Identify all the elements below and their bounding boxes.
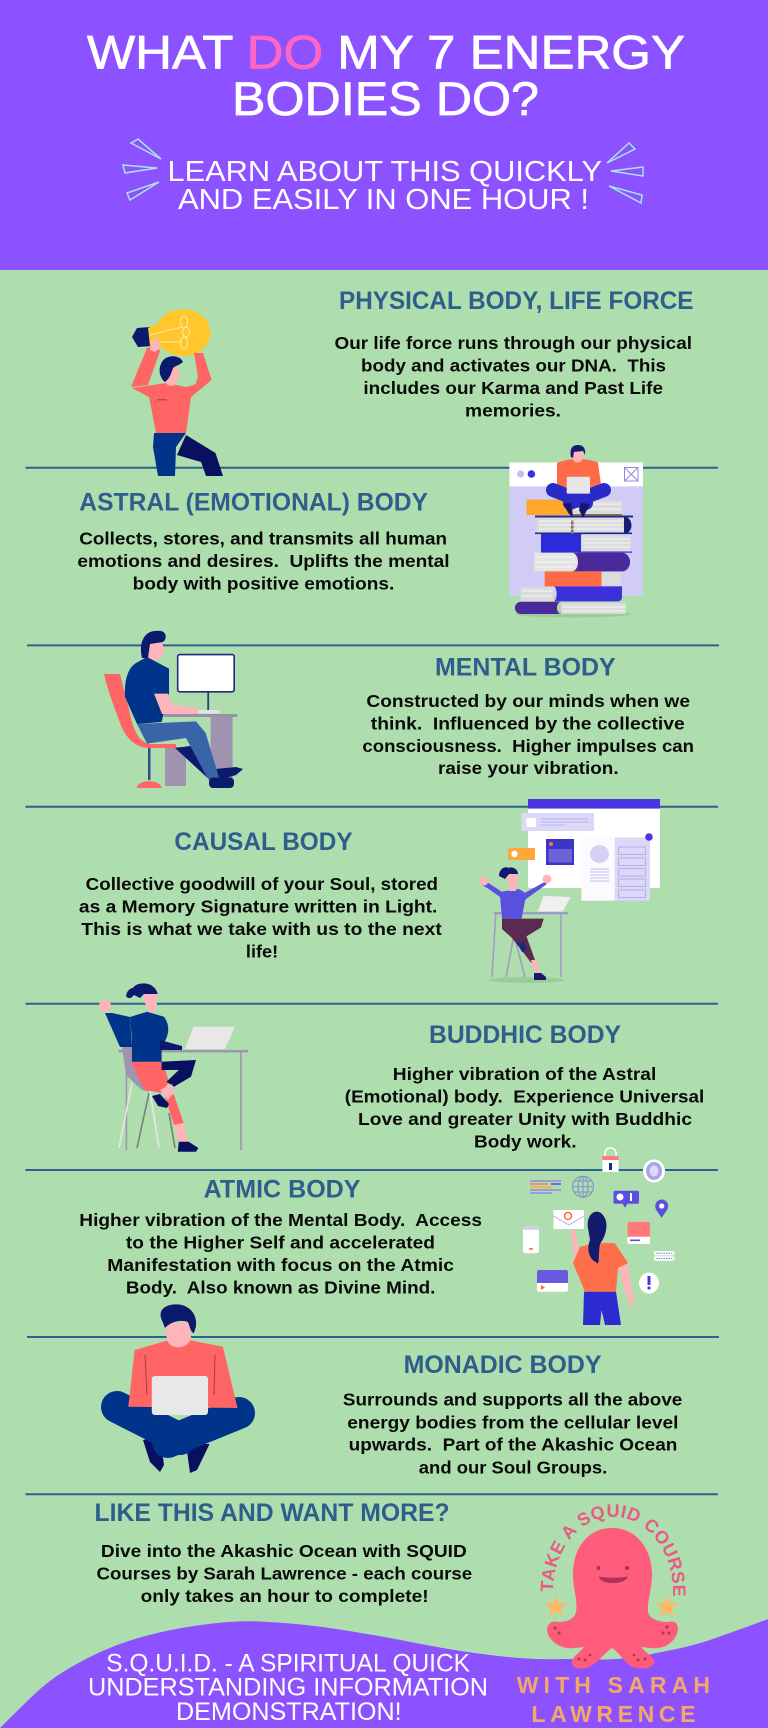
panel: call to action xyxy=(94,1499,472,1606)
icon: SQUID course badge xyxy=(516,1504,710,1727)
icon: person on book stack xyxy=(509,445,643,618)
text: buddhic body description: (Emotional) body. Experience Universal xyxy=(345,1086,704,1106)
title: WHAT DO MY 7 ENERGY xyxy=(87,26,685,78)
text: causal body description: This is what we take with us to the next xyxy=(81,919,442,939)
text: causal body description xyxy=(79,874,442,962)
text: mental body description: think. Influenced by the collective xyxy=(371,713,685,733)
heading: like this and want more: LIKE THIS AND WANT MORE? xyxy=(94,1499,450,1527)
text: mental body description: consciousness. Higher impulses can xyxy=(362,736,694,756)
text: physical body description xyxy=(334,333,692,421)
subtitle: AND EASILY IN ONE HOUR ! xyxy=(178,184,589,216)
panel: physical body xyxy=(131,287,694,476)
subtitle xyxy=(168,156,602,216)
text: course description: Dive into the Akashic Ocean with SQUID xyxy=(101,1541,467,1561)
text: physical body description: body and activates our DNA. This xyxy=(361,356,666,376)
text: physical body description: includes our Karma and Past Life xyxy=(363,378,663,398)
heading: atmic body: ATMIC BODY xyxy=(204,1176,361,1204)
title xyxy=(87,26,685,125)
text: SQUID footer tagline: UNDERSTANDING INFORMATION xyxy=(88,1674,488,1702)
text: atmic body description: to the Higher Self and accelerated xyxy=(126,1232,435,1252)
text: atmic body description: Higher vibration of the Mental Body. Access xyxy=(79,1210,482,1230)
text: SQUID footer tagline: S.Q.U.I.D. - A SPIRITUAL QUICK xyxy=(106,1650,470,1678)
subtitle: LEARN ABOUT THIS QUICKLY xyxy=(168,156,602,188)
curved text: take a squid course: TAKE A SQUID COURSE xyxy=(540,1504,686,1596)
icon: person cross-legged with laptop xyxy=(117,1304,239,1473)
text: monadic body description: energy bodies from the cellular level xyxy=(347,1412,678,1432)
text: atmic body description: Manifestation with focus on the Atmic xyxy=(107,1255,454,1275)
icon: man at computer desk xyxy=(104,631,243,788)
panel: atmic body xyxy=(79,1148,675,1325)
text: astral body description: body with positive emotions. xyxy=(133,573,394,593)
text: atmic body description xyxy=(79,1210,482,1297)
text: with sarah lawrence xyxy=(517,1672,710,1727)
panel: astral body xyxy=(77,445,643,618)
section divider lines xyxy=(26,468,719,1494)
text: buddhic body description: Love and greater Unity with Buddhic xyxy=(358,1109,692,1129)
text: SQUID footer tagline: DEMONSTRATION! xyxy=(176,1698,402,1726)
text: mental body description: Constructed by our minds when we xyxy=(366,691,690,711)
text: astral body description: emotions and desires. Uplifts the mental xyxy=(77,551,450,571)
text: physical body description: memories. xyxy=(465,401,561,421)
text: causal body description: Collective goodwill of your Soul, stored xyxy=(86,874,438,894)
text: physical body description: Our life force runs through our physical xyxy=(334,333,692,353)
text: course description xyxy=(96,1541,472,1606)
icon: woman with floating app icons xyxy=(523,1148,674,1325)
icon: woman at desk with web window xyxy=(480,799,660,983)
wave: purple footer shape xyxy=(0,1619,768,1728)
panel: monadic body xyxy=(117,1304,683,1477)
text: mental body description xyxy=(362,691,694,778)
text: causal body description: as a Memory Signature written in Light. xyxy=(79,896,437,916)
title: BODIES DO? xyxy=(232,72,539,125)
text: with sarah lawrence: LAWRENCE xyxy=(531,1701,696,1727)
heading: buddhic body: BUDDHIC BODY xyxy=(429,1021,621,1049)
panel: header xyxy=(0,0,768,270)
text: buddhic body description: Higher vibration of the Astral xyxy=(393,1064,656,1084)
icon: left burst rays xyxy=(123,139,161,200)
text: mental body description: raise your vibration. xyxy=(438,758,619,778)
icon: right star xyxy=(656,1595,678,1617)
panel: buddhic body xyxy=(99,983,704,1152)
text: monadic body description: Surrounds and supports all the above xyxy=(343,1390,683,1410)
icon: left star xyxy=(545,1595,567,1617)
text: monadic body description: and our Soul Groups. xyxy=(419,1457,607,1477)
heading: physical body: PHYSICAL BODY, LIFE FORCE xyxy=(339,287,694,315)
panel: causal body xyxy=(79,799,660,983)
text: monadic body description: upwards. Part of the Akashic Ocean xyxy=(349,1435,677,1455)
text: causal body description: life! xyxy=(246,942,278,962)
text: SQUID footer tagline xyxy=(88,1650,488,1726)
text: monadic body description xyxy=(343,1390,683,1477)
text: course description: Courses by Sarah Lawrence - each course xyxy=(96,1563,472,1583)
icon: right burst rays xyxy=(607,143,643,203)
panel: mental body xyxy=(104,631,694,788)
heading: astral body: ASTRAL (EMOTIONAL) BODY xyxy=(79,489,428,517)
text: course description: only takes an hour to complete! xyxy=(141,1586,429,1606)
text: with sarah lawrence: WITH SARAH xyxy=(517,1672,710,1698)
icon: person lifting light bulb xyxy=(131,309,223,476)
text: astral body description xyxy=(77,529,450,593)
heading: causal body: CAUSAL BODY xyxy=(174,828,353,856)
text: atmic body description: Body. Also known as Divine Mind. xyxy=(126,1277,435,1297)
heading: monadic body: MONADIC BODY xyxy=(404,1351,602,1379)
text: astral body description: Collects, stores, and transmits all human xyxy=(79,529,447,549)
squid character xyxy=(547,1528,678,1668)
text: buddhic body description: Body work. xyxy=(474,1131,576,1151)
heading: mental body: MENTAL BODY xyxy=(435,654,616,682)
text: buddhic body description xyxy=(345,1064,704,1151)
icon: woman meditating at desk xyxy=(99,983,248,1152)
